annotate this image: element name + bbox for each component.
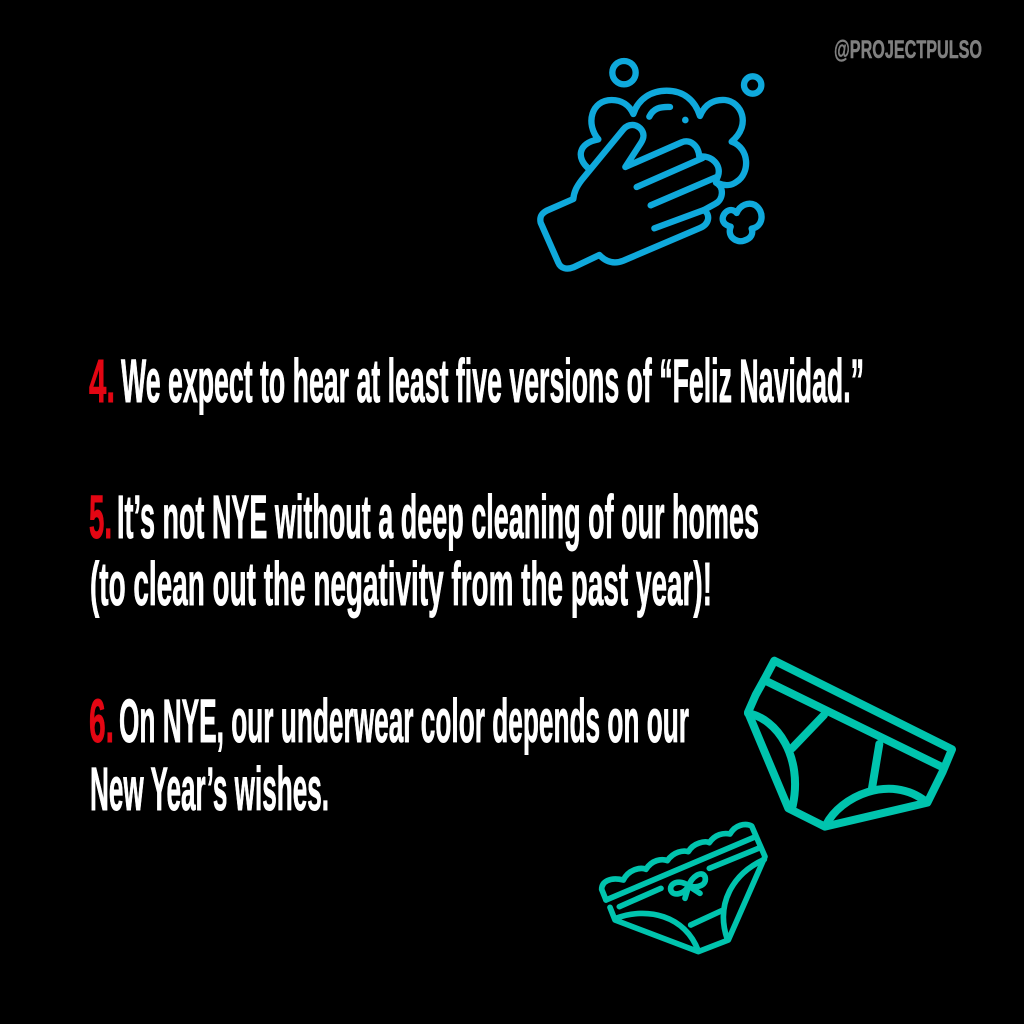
item 6 text: New Year’s wishes. [90,755,329,823]
item 5 text: 5. [89,483,112,551]
item 5 text [89,483,759,618]
icon: women's underwear with bow [602,825,765,952]
item 6 text [89,687,689,823]
icon: hand washing with soap bubbles [540,61,762,269]
icon: men's briefs [748,661,952,827]
item 4 text: 4. [89,347,115,415]
item 6 text: 6. [89,687,114,755]
